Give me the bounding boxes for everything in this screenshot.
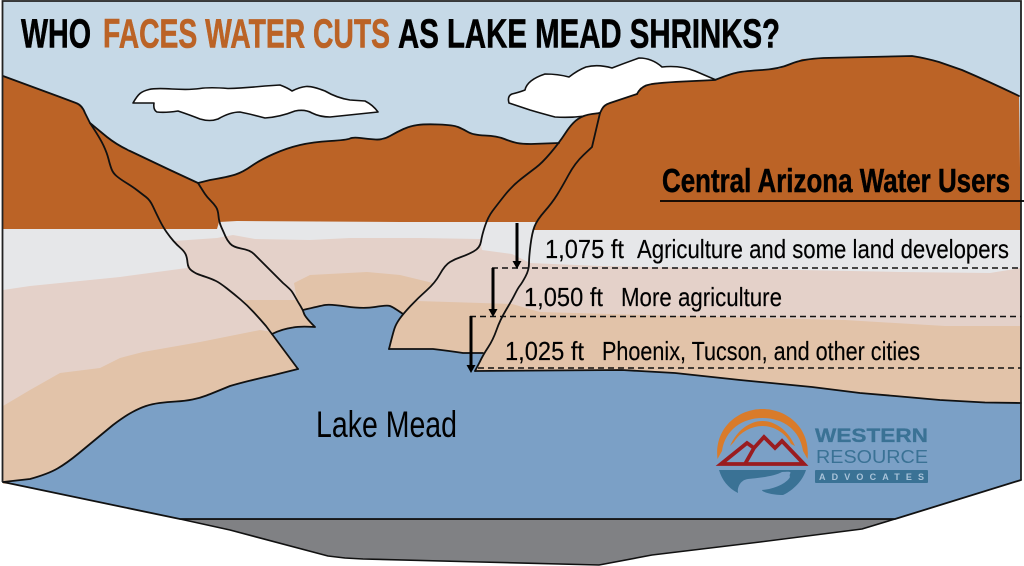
logo wordmark: resource: RESOURCE — [816, 447, 928, 467]
outline: right front cliff — [475, 94, 637, 371]
users: more agriculture: More agriculture — [621, 282, 782, 312]
logo wordmark: western: WESTERN — [815, 426, 928, 447]
outline: back ridge — [198, 124, 559, 183]
outline: far shore — [389, 349, 483, 353]
title — [21, 10, 780, 56]
title: who: WHO — [21, 10, 91, 56]
logo wordmark: advocates bar — [815, 470, 928, 483]
logo icon: red mountains — [721, 437, 804, 464]
lake bed: grey — [180, 519, 895, 565]
logo wordmark: advocates: ADVOCATES — [819, 472, 924, 482]
arrow: to 1,025 ft — [466, 316, 476, 373]
rock layer: tan band (1,025 ft) — [3, 272, 1021, 484]
outline: lake notch — [303, 305, 403, 314]
outline: left shore — [3, 369, 298, 482]
arrow: to 1,050 ft — [488, 268, 498, 317]
arrow: to 1,075 ft — [512, 223, 522, 269]
label: lake mead: Lake Mead — [316, 404, 457, 445]
logo icon: water — [719, 470, 806, 495]
logo icon: outer sun arc — [717, 409, 808, 459]
outline: right shore — [475, 370, 1021, 403]
outline: right inner cliff — [389, 113, 600, 349]
title: as lake mead shrinks: AS LAKE MEAD SHRINKS? — [398, 10, 780, 56]
outline: left cliff — [3, 76, 298, 369]
level: 1,075 ft: 1,075 ft — [545, 234, 625, 264]
cloud: left — [133, 85, 378, 120]
users: cities: Phoenix, Tucson, and other cities — [602, 336, 920, 366]
level: 1,050 ft: 1,050 ft — [524, 282, 604, 312]
rock layer: grey band (1,075 ft) — [3, 221, 1021, 300]
outline: second ridge and cliff — [90, 123, 315, 334]
outline: right plateau — [637, 56, 1019, 96]
sky background — [3, 1, 1021, 301]
lake water — [3, 304, 1021, 519]
logo: western resource advocates — [717, 409, 928, 495]
outline: water bottom — [3, 480, 1021, 519]
cloud: right — [508, 58, 716, 120]
logo icon: inner sun arc — [730, 421, 795, 446]
canyon walls: orange rock — [3, 56, 1021, 240]
level: 1,025 ft: 1,025 ft — [505, 336, 585, 366]
labels: water levels — [505, 234, 1009, 366]
rock layer: pink band (1,050 ft) — [3, 235, 1021, 420]
title: faces water cuts: FACES WATER CUTS — [103, 10, 390, 56]
dashed level lines — [470, 268, 1021, 368]
